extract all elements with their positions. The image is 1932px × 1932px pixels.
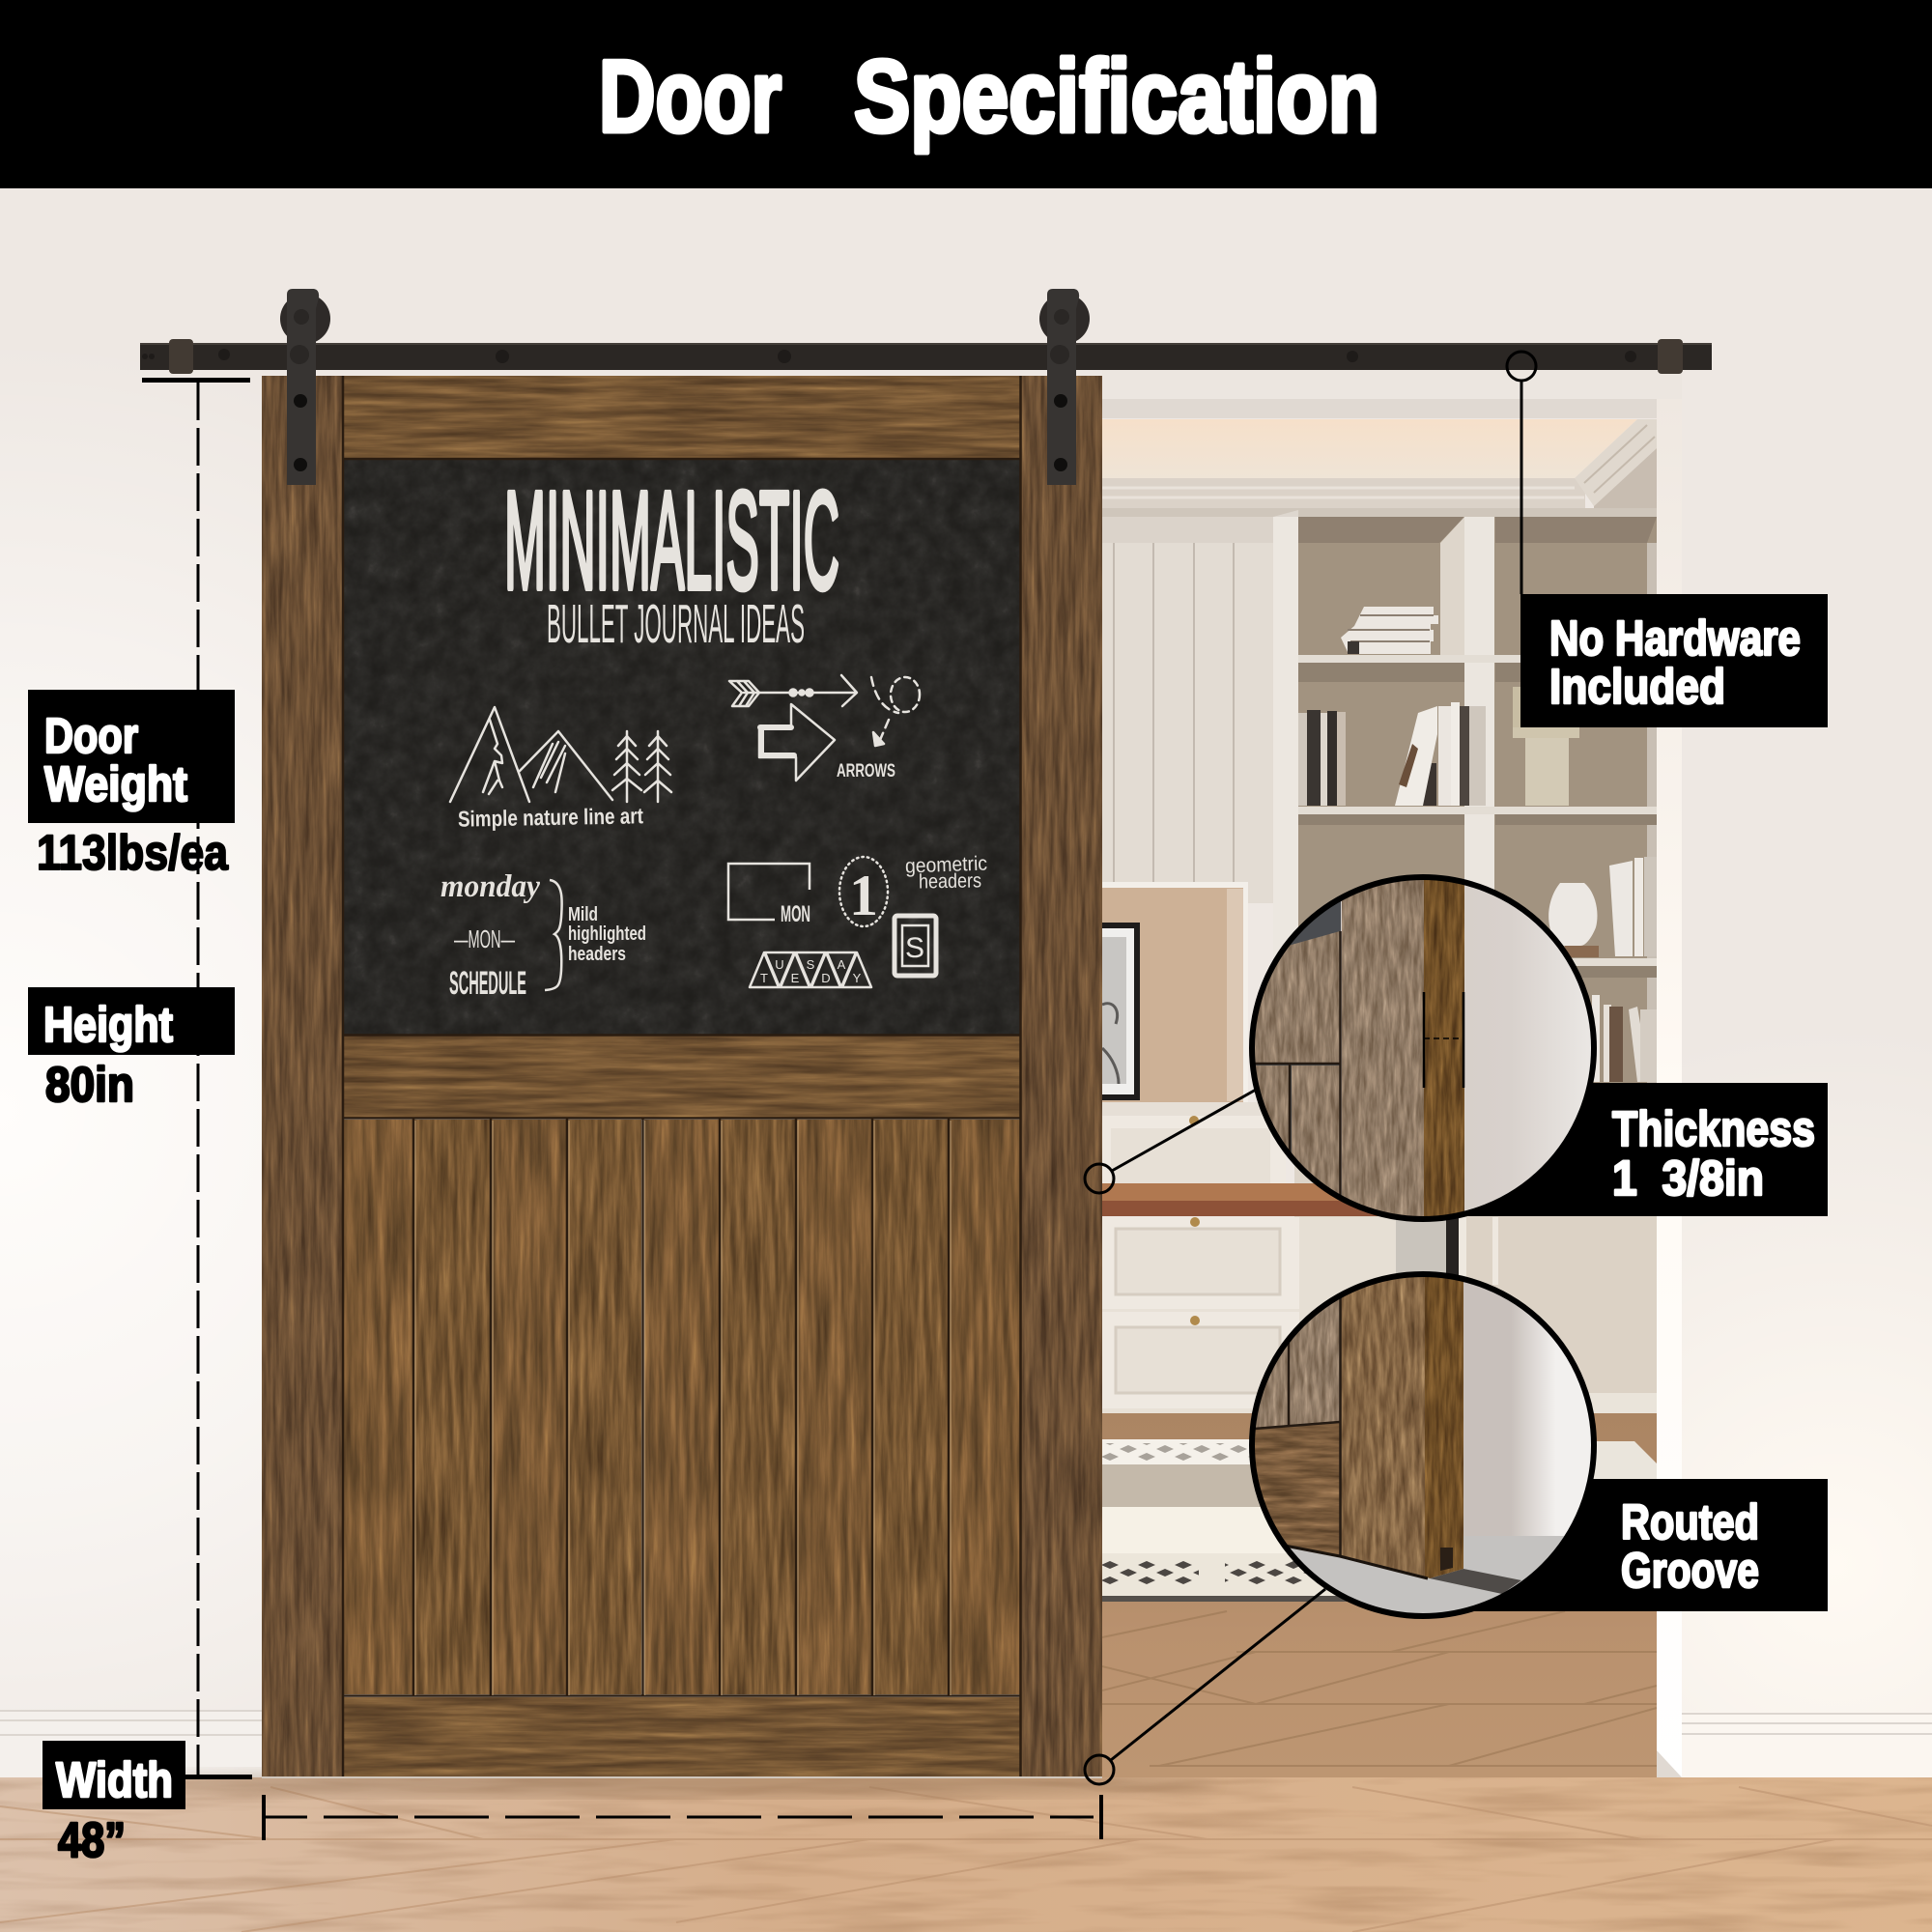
label: no hardware included: No Hardware — [1549, 611, 1801, 666]
callout rings — [1085, 352, 1536, 1784]
chalk geometric headers: MON — [781, 901, 810, 927]
chalkboard panel — [344, 460, 1020, 1035]
value: width: 48” — [58, 1812, 126, 1867]
chalk headers list — [440, 869, 646, 1002]
books bottom shelf — [1592, 995, 1657, 1082]
label: door weight — [28, 690, 235, 823]
chalk geometric headers: geometric — [905, 853, 987, 877]
label: door weight: Weight — [44, 756, 187, 811]
detail circle: routed groove — [1250, 1270, 1598, 1623]
left stile — [262, 376, 343, 1777]
value: door weight: 113lbs/ea — [37, 825, 229, 880]
chalk headers list: Mild — [568, 904, 598, 925]
patterned rug — [1102, 1439, 1657, 1602]
chalk geometric headers: headers — [919, 869, 981, 894]
wooden floor — [0, 1770, 1932, 1932]
label: height — [28, 987, 235, 1055]
chalk geometric headers: S — [905, 932, 924, 964]
label: thickness box: 1 3/8in — [1612, 1151, 1764, 1206]
header bar — [0, 0, 1932, 188]
chalk arrows — [729, 675, 920, 781]
bottom rail — [344, 1697, 1020, 1777]
left end stop — [169, 339, 193, 374]
chalk caption nature: Simple nature line art — [458, 803, 643, 832]
framed artwork — [1102, 882, 1248, 1104]
chalk bunting TUESDAY: D — [821, 971, 831, 985]
books top shelf — [1341, 607, 1438, 654]
far wall and cabinet right — [1299, 1217, 1657, 1415]
label: door weight: Door — [44, 708, 138, 763]
detail circle: thickness — [1250, 874, 1598, 1224]
room seen through doorway — [1102, 399, 1682, 1777]
chalk bunting TUESDAY: T — [760, 971, 768, 985]
label: routed groove box: Routed — [1621, 1494, 1759, 1549]
label: width — [43, 1741, 185, 1809]
door jamb — [1657, 399, 1682, 1777]
label: thickness box: Thickness — [1612, 1101, 1815, 1156]
right roller hanger — [1039, 289, 1090, 485]
top wall above doorway — [1102, 370, 1682, 399]
label: routed groove box: Groove — [1621, 1543, 1759, 1598]
chalk bunting TUESDAY: A — [838, 957, 846, 972]
label: no hardware included — [1520, 594, 1828, 727]
chalk bunting TUESDAY: S — [807, 957, 815, 972]
chalkboard panel: BULLET JOURNAL IDEAS — [547, 593, 805, 655]
chalk caption arrows: ARROWS — [837, 761, 895, 781]
chalk bunting TUESDAY: Y — [853, 971, 862, 985]
desk — [1102, 1183, 1391, 1216]
label: no hardware included: Included — [1549, 659, 1725, 714]
vase and books third shelf — [1548, 857, 1657, 957]
vertical planks — [344, 1120, 1020, 1694]
chalkboard panel: MINIMALISTIC — [504, 463, 839, 618]
value: height: 80in — [45, 1057, 134, 1112]
label: width: Width — [56, 1752, 173, 1807]
middle rail — [344, 1036, 1020, 1118]
left roller hanger — [280, 289, 330, 485]
chalk mountains and trees — [450, 707, 671, 802]
chalk geometric headers: 1 — [849, 864, 878, 927]
right stile — [1021, 376, 1102, 1777]
chalk geometric headers — [728, 853, 987, 976]
label: height: Height — [43, 997, 173, 1052]
room floor — [1102, 1413, 1657, 1777]
room upper wall and soffit — [1102, 399, 1682, 1777]
chalk headers list: monday — [440, 869, 540, 904]
chalk bunting TUESDAY: E — [791, 971, 800, 985]
label: routed groove box — [1468, 1479, 1828, 1611]
paneled wall — [1102, 517, 1274, 903]
right end stop — [1658, 339, 1683, 374]
sculpture — [1513, 687, 1579, 806]
cabinet — [1102, 1102, 1322, 1415]
chalk bunting TUESDAY — [750, 952, 871, 987]
title: first word: Door — [599, 40, 781, 154]
sliding track — [140, 339, 1712, 374]
books second shelf middle — [1395, 702, 1486, 806]
baseboards — [0, 1710, 1932, 1777]
books second shelf left — [1298, 710, 1346, 806]
height dimension line — [142, 378, 252, 1779]
chalk headers list: headers — [568, 944, 626, 965]
title: second word: Specification — [854, 40, 1379, 154]
top rail — [344, 376, 1020, 458]
label: thickness box — [1468, 1083, 1828, 1216]
chalk headers list: —MON— — [454, 924, 515, 953]
cove light — [1102, 419, 1637, 478]
callout lines — [1111, 381, 1521, 1760]
chalk bunting TUESDAY: U — [775, 957, 784, 972]
wall behind cabinets — [1294, 1111, 1657, 1413]
chalk headers list: SCHEDULE — [449, 965, 526, 1002]
track bolts — [142, 349, 1636, 363]
bookcase — [1273, 510, 1657, 1116]
chalk headers list: highlighted — [568, 923, 646, 945]
width dimension line — [262, 1795, 1103, 1840]
crown moulding — [1102, 419, 1657, 518]
barn door — [262, 376, 1102, 1778]
